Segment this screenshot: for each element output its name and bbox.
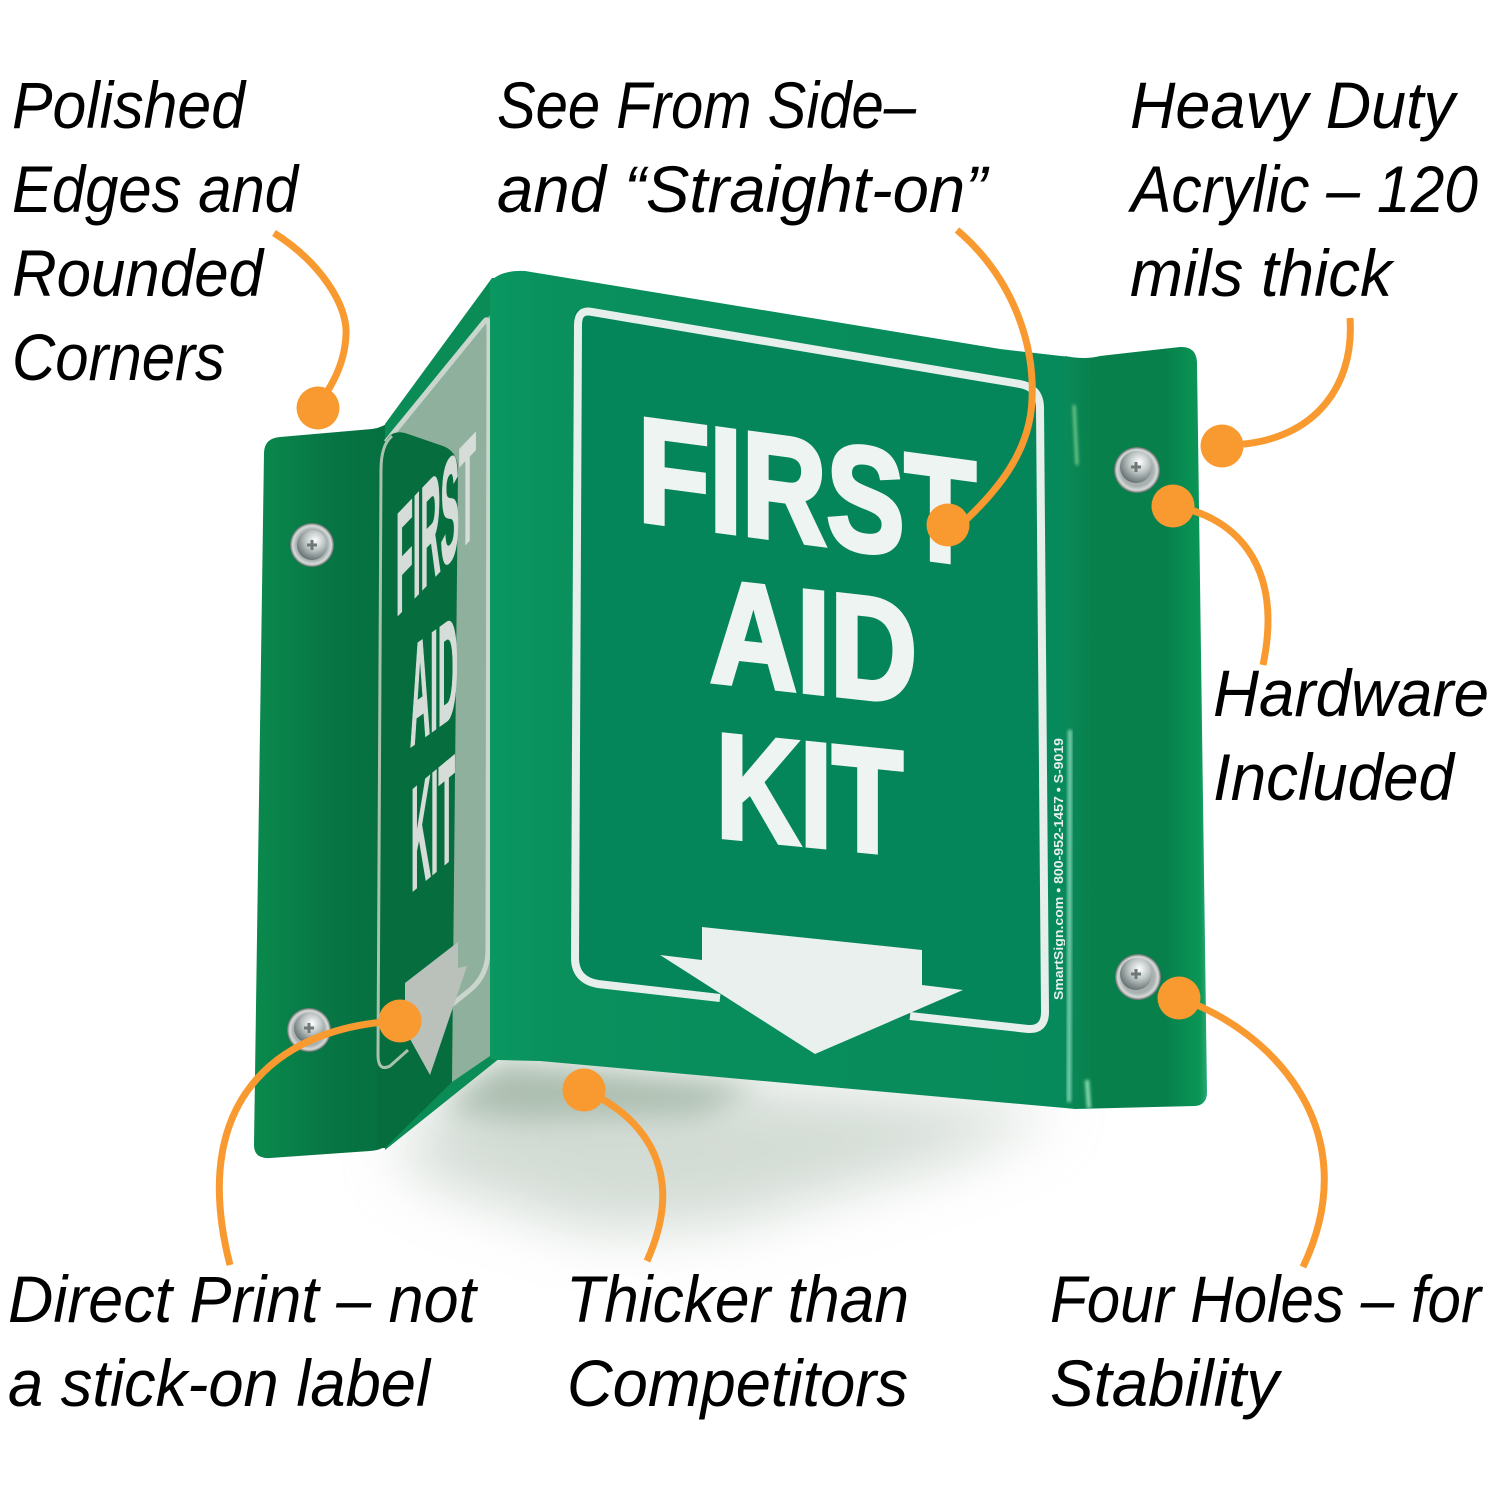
- label: heavy duty acrylic: Acrylic – 120: [1127, 152, 1478, 226]
- callout connector: thicker: [562, 1068, 663, 1261]
- label: heavy duty acrylic: mils thick: [1130, 236, 1395, 310]
- floor shadow under sign: [390, 1060, 1065, 1230]
- heading text KIT: KIT: [716, 703, 903, 887]
- label: direct print: a stick-on label: [8, 1346, 432, 1420]
- label: four holes: Stability: [1050, 1346, 1283, 1420]
- callout connector: four holes: [1158, 976, 1324, 1267]
- label: polished edges: Edges and: [12, 152, 300, 226]
- label: heavy duty acrylic: Heavy Duty: [1130, 68, 1459, 142]
- label: hardware included: [1213, 656, 1489, 814]
- sign body: FIRST: [396, 401, 476, 648]
- screw bottom left: [287, 1008, 331, 1052]
- main down arrow: [660, 927, 963, 1054]
- callout connector: heavy duty: [1200, 318, 1350, 468]
- callout connector: direct print: [219, 1000, 422, 1265]
- main face: [572, 310, 1048, 1032]
- screw top right: [1114, 447, 1160, 493]
- side panel dark reflection: [378, 432, 458, 1148]
- label: see from side: and “Straight-on”: [497, 152, 990, 226]
- label: thicker than competitors: Thicker than: [566, 1262, 909, 1336]
- label: direct print: [8, 1262, 479, 1420]
- side panel thin white border: [378, 436, 408, 1068]
- bend highlights: [505, 300, 1089, 1108]
- side panel reflective area: [380, 315, 490, 1130]
- side panel: [378, 278, 500, 1150]
- main panel with bend: [490, 271, 1075, 1108]
- label: polished edges: Polished: [12, 68, 247, 142]
- label: hardware included: Included: [1213, 740, 1456, 814]
- label: polished edges: Rounded: [12, 236, 265, 310]
- label: thicker than competitors: [566, 1262, 909, 1420]
- screw top left: [290, 523, 334, 567]
- label: see from side: [497, 68, 990, 226]
- label: hardware included: Hardware: [1213, 656, 1489, 730]
- sign body: [254, 271, 1207, 1158]
- vendor imprint: SmartSign.com • 800-952-1457 • S-9019: [1052, 738, 1066, 1000]
- side arrow: [405, 942, 467, 1075]
- main face white border: [575, 312, 1045, 1029]
- left flange: [254, 420, 392, 1158]
- right flange: [1065, 347, 1207, 1109]
- label: direct print: Direct Print – not: [8, 1262, 479, 1336]
- callout connector: hardware: [1152, 484, 1268, 665]
- heading text FIRST: FIRST: [638, 386, 976, 597]
- label: four holes: [1050, 1262, 1484, 1420]
- label: see from side: See From Side–: [497, 68, 917, 142]
- label: heavy duty acrylic: [1127, 68, 1478, 310]
- heading text AID: AID: [710, 549, 917, 736]
- side panel white border upper: [386, 320, 489, 1006]
- callout connector: see from side: [926, 230, 1032, 546]
- sign body: AID: [410, 584, 458, 777]
- label: thicker than competitors: Competitors: [567, 1346, 908, 1420]
- label: polished edges: Corners: [12, 320, 225, 394]
- callout connector: polished edges: [274, 233, 346, 430]
- label: polished edges: [12, 68, 300, 394]
- screw bottom right: [1115, 954, 1161, 1000]
- sign body: KIT: [411, 724, 455, 923]
